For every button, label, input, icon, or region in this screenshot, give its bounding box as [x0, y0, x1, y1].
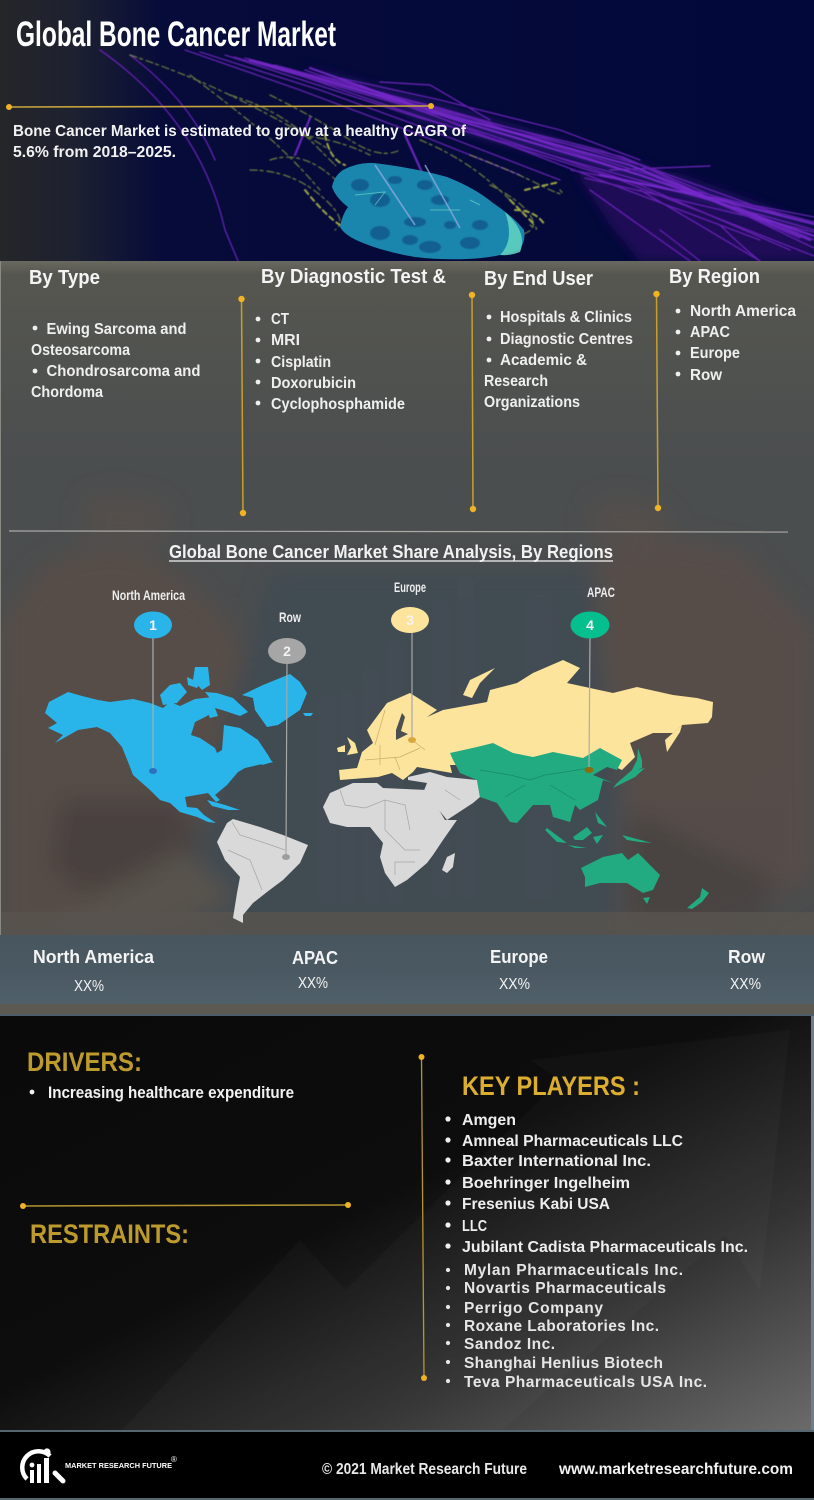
key players heading: KEY PLAYERS :: [462, 1071, 640, 1101]
list: Europe: [690, 345, 740, 362]
list: [484, 309, 633, 411]
panel: regional share band: [0, 935, 814, 1016]
list: Osteosarcoma: [31, 342, 130, 359]
stat: north america: North America: [33, 947, 155, 967]
map heading: Global Bone Cancer Market Share Analysis, By Regions: [169, 542, 613, 562]
key players list: Boehringer Ingelheim: [462, 1175, 630, 1192]
heading: By End User: [484, 268, 593, 290]
list: Cyclophosphamide: [271, 396, 405, 413]
key players list: Perrigo Company: [464, 1300, 603, 1317]
stat: europe: Europe: [490, 947, 548, 967]
key players list: Jubilant Cadista Pharmaceuticals Inc.: [462, 1239, 748, 1256]
purple haze: [300, 65, 814, 261]
heading: By Region: [669, 266, 760, 288]
list: Ewing Sarcoma and: [46, 321, 186, 338]
stat: apac: [292, 948, 338, 992]
gold divider: [6, 103, 434, 110]
list: Cisplatin: [271, 354, 331, 371]
stat: apac: APAC: [292, 948, 338, 968]
list: Chordoma: [31, 384, 103, 401]
stat: north america: [33, 947, 155, 995]
list: Chondrosarcoma and: [46, 363, 200, 380]
pin: north america: 1: [149, 617, 157, 633]
stat: row: XX%: [730, 976, 761, 993]
list: Research: [484, 373, 548, 390]
pin: north america: [112, 587, 185, 774]
drivers list: Increasing healthcare expenditure: [48, 1084, 294, 1102]
pin: apac: 4: [586, 617, 594, 633]
key players list: [445, 1112, 748, 1391]
restraints heading: RESTRAINTS:: [30, 1219, 189, 1249]
list: Row: [690, 367, 723, 384]
divider: type and test: [238, 296, 246, 516]
panel: by type: [29, 267, 200, 401]
world map: [45, 660, 713, 923]
logo wordmark: ®: [171, 1455, 177, 1464]
panel: by end user: [484, 268, 633, 411]
stat: row: [728, 947, 766, 993]
key players list: Amgen: [462, 1112, 516, 1129]
key players list: Baxter International Inc.: [462, 1153, 651, 1170]
stat: europe: XX%: [499, 976, 530, 993]
website: www.marketresearchfuture.com: [558, 1461, 793, 1478]
divider: test and end user: [469, 292, 476, 512]
pin: row: 2: [283, 643, 291, 659]
region: apac: [450, 743, 709, 909]
region: north america: [45, 667, 313, 823]
key players list: LLC: [462, 1218, 487, 1235]
list: MRI: [271, 332, 300, 349]
title: Global Bone Cancer Market: [16, 15, 336, 54]
list: APAC: [690, 324, 730, 341]
list: [256, 311, 405, 413]
panel: drivers, restraints and key players background: [0, 1016, 814, 1432]
pin: row: [268, 609, 306, 860]
pin: europe: Europe: [394, 579, 426, 595]
cell fibres artwork: [100, 50, 814, 261]
logo wordmark: MARKET RESEARCH FUTURE: [65, 1461, 172, 1470]
key players list: Roxane Laboratories Inc.: [464, 1318, 659, 1335]
pin: north america: North America: [112, 587, 185, 603]
vertical gold divider: [418, 1054, 427, 1381]
icon: market research future logo: [22, 1448, 63, 1483]
list: Doxorubicin: [271, 375, 356, 392]
icon: cell nucleus: [332, 163, 524, 259]
pin: europe: [391, 579, 429, 743]
list: [676, 303, 796, 384]
key players list: Shanghai Henlius Biotech: [464, 1355, 663, 1372]
key players list: Amneal Pharmaceuticals LLC: [462, 1133, 683, 1150]
pin: apac: [570, 584, 615, 773]
stat: north america: XX%: [74, 978, 104, 995]
panel: by diagnostic test: [256, 266, 446, 413]
list: [31, 321, 200, 401]
pin: row: Row: [279, 609, 301, 625]
logo wordmark: [65, 1455, 177, 1470]
region: europe and russia: [337, 660, 713, 780]
stat: row: Row: [728, 947, 766, 967]
gold divider: [20, 1202, 351, 1209]
region: row americas, africa, middle east: [217, 772, 480, 923]
list: North America: [690, 303, 796, 320]
list: Hospitals & Clinics: [500, 309, 632, 326]
list: Diagnostic Centres: [500, 331, 633, 348]
heading: By Type: [29, 267, 100, 289]
list: Academic &: [500, 352, 587, 369]
list: CT: [271, 311, 289, 328]
summary text: [13, 123, 467, 161]
key players list: Teva Pharmaceuticals USA Inc.: [464, 1374, 707, 1391]
stat: apac: XX%: [298, 975, 328, 992]
summary text: Bone Cancer Market is estimated to grow at a healthy CAGR of: [13, 123, 467, 140]
pin: apac: APAC: [587, 584, 615, 600]
pin: europe: 3: [406, 612, 414, 628]
divider: end user and region: [653, 291, 661, 511]
key players list: Mylan Pharmaceuticals Inc.: [464, 1262, 683, 1279]
copyright: © 2021 Market Research Future: [322, 1461, 527, 1478]
key players list: Fresenius Kabi USA: [462, 1196, 610, 1213]
panel: segmentation and map background: [0, 261, 814, 1015]
drivers heading: DRIVERS:: [27, 1047, 142, 1077]
panel: by region: [669, 266, 796, 384]
heading: By Diagnostic Test &: [261, 266, 446, 288]
summary text: 5.6% from 2018–2025.: [13, 144, 176, 161]
key players list: Novartis Pharmaceuticals: [464, 1280, 666, 1297]
key players list: Sandoz Inc.: [464, 1336, 555, 1353]
list: Organizations: [484, 394, 580, 411]
panel: header banner: [0, 0, 814, 261]
panel: footer: [0, 1432, 814, 1500]
stat: europe: [490, 947, 548, 993]
